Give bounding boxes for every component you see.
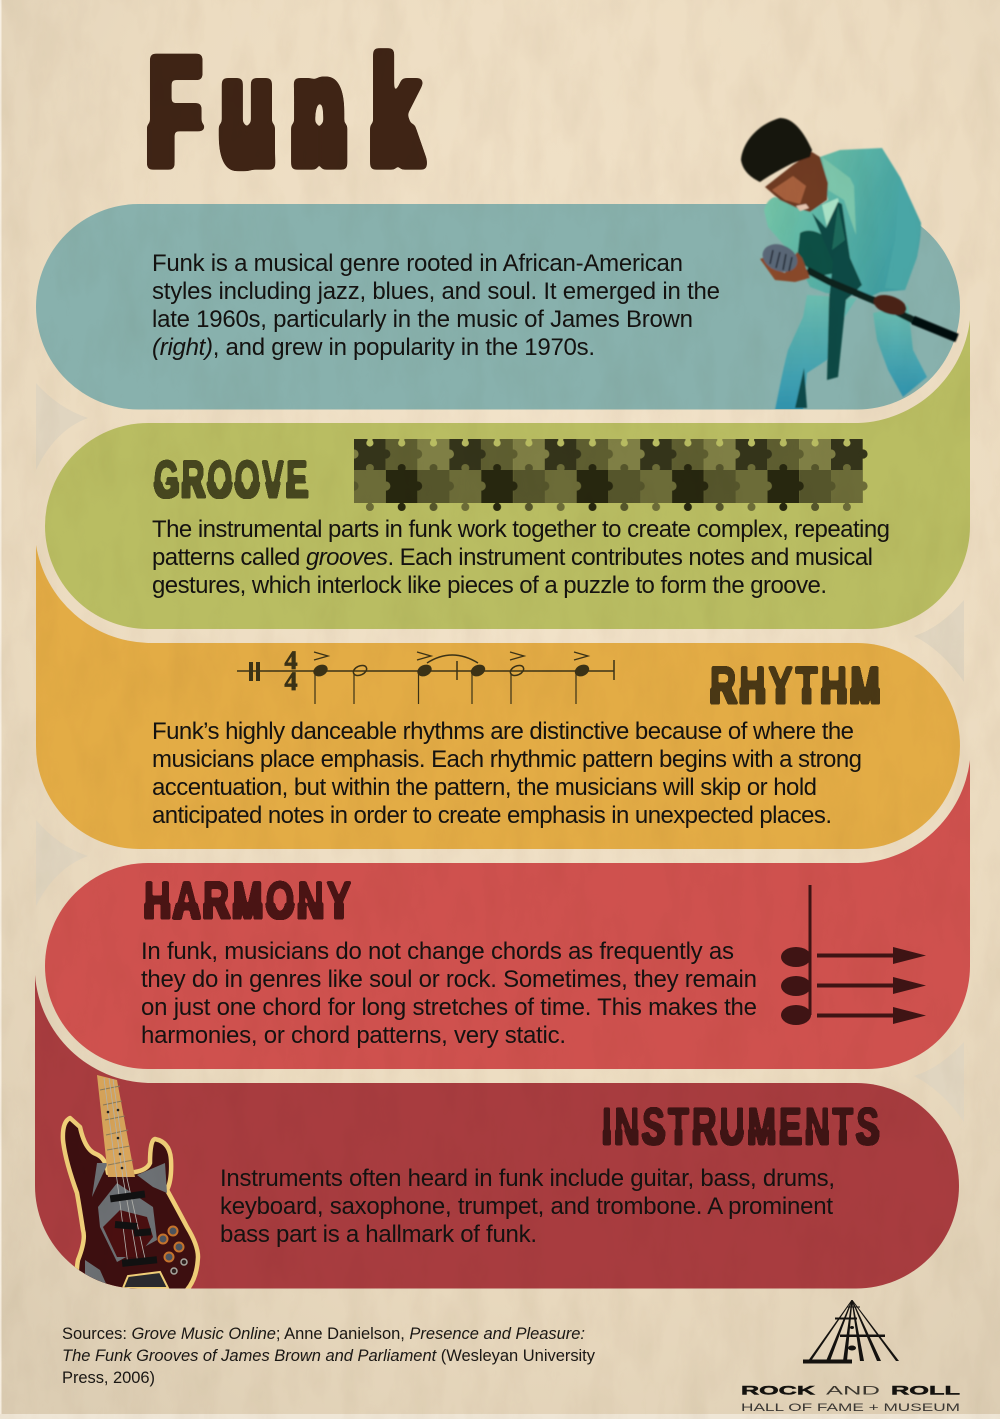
panel: intro bbox=[36, 118, 960, 410]
instruments text: Instruments often heard in funk include guitar, bass, drums, bbox=[220, 1165, 835, 1192]
icon: static chord with arrows bbox=[781, 885, 926, 1025]
harmony text: In funk, musicians do not change chords as frequently as bbox=[141, 938, 734, 965]
groove heading: GROOVE bbox=[154, 451, 310, 509]
rhythm text bbox=[152, 718, 862, 829]
panel: instruments bbox=[35, 975, 959, 1292]
harmony text: on just one chord for long stretches of time. This makes the bbox=[141, 994, 757, 1021]
time signature: 4 bbox=[284, 667, 298, 696]
harmony text: they do in genres like soul or rock. Sometimes, they remain bbox=[141, 966, 757, 993]
instruments text: bass part is a hallmark of funk. bbox=[220, 1221, 537, 1248]
intro text: Funk is a musical genre rooted in African-American bbox=[152, 250, 683, 277]
instruments background bbox=[35, 975, 959, 1288]
time signature: 4 bbox=[284, 646, 298, 675]
rhythm background bbox=[36, 545, 960, 849]
puzzle pieces graphic bbox=[354, 433, 868, 511]
logo: Rock and Roll Hall of Fame bbox=[741, 1300, 960, 1414]
rhythm text: accentuation, but within the pattern, the musicians will skip or hold bbox=[152, 774, 817, 801]
instruments text: keyboard, saxophone, trumpet, and trombone. A prominent bbox=[220, 1193, 833, 1220]
logo mark bbox=[803, 1300, 899, 1364]
panel: rhythm bbox=[36, 545, 960, 849]
logo wordmark: ROCK bbox=[741, 1386, 816, 1398]
groove text: gestures, which interlock like pieces of a puzzle to form the groove. bbox=[152, 572, 827, 599]
illustration: bass guitar bbox=[63, 1075, 198, 1292]
rhythm heading: RHYTHM bbox=[710, 657, 883, 715]
harmony text: harmonies, or chord patterns, very static. bbox=[141, 1022, 566, 1049]
groove text: The instrumental parts in funk work together to create complex, repeating bbox=[152, 516, 890, 543]
logo wordmark: AND bbox=[826, 1386, 880, 1398]
title: Funk bbox=[149, 26, 420, 196]
sources: The Funk Grooves of James Brown and Parliament (Wesleyan University bbox=[62, 1347, 596, 1365]
logo wordmark: HALL OF FAME + MUSEUM bbox=[741, 1402, 960, 1414]
sources: Sources: Grove Music Online; Anne Danielson, Presence and Pleasure: bbox=[62, 1325, 585, 1343]
intro text: late 1960s, particularly in the music of James Brown bbox=[152, 306, 693, 333]
instruments text bbox=[220, 1165, 835, 1248]
time signature bbox=[284, 646, 298, 696]
harmony background bbox=[45, 760, 970, 1069]
intro text: (right), and grew in popularity in the 1970s. bbox=[152, 334, 595, 361]
panel: harmony bbox=[45, 760, 970, 1069]
intro text bbox=[152, 250, 720, 361]
rhythm text: Funk’s highly danceable rhythms are distinctive because of where the bbox=[152, 718, 854, 745]
harmony text bbox=[141, 938, 757, 1049]
panel: groove bbox=[45, 320, 970, 629]
logo wordmark: ROLL bbox=[891, 1386, 960, 1398]
sources bbox=[62, 1325, 596, 1387]
groove text bbox=[152, 516, 890, 599]
logo wordmark bbox=[741, 1386, 960, 1414]
rhythm text: musicians place emphasis. Each rhythmic pattern begins with a strong bbox=[152, 746, 862, 773]
illustration: James Brown with microphone bbox=[741, 118, 957, 410]
rhythm text: anticipated notes in order to create emphasis in unexpected places. bbox=[152, 802, 832, 829]
intro background bbox=[36, 204, 960, 410]
intro text: styles including jazz, blues, and soul. It emerged in the bbox=[152, 278, 720, 305]
groove background bbox=[45, 320, 970, 629]
groove text: patterns called grooves. Each instrument contributes notes and musical bbox=[152, 544, 873, 571]
sources: Press, 2006) bbox=[62, 1369, 155, 1387]
rhythm notation bbox=[237, 652, 614, 704]
harmony heading: HARMONY bbox=[144, 872, 354, 930]
